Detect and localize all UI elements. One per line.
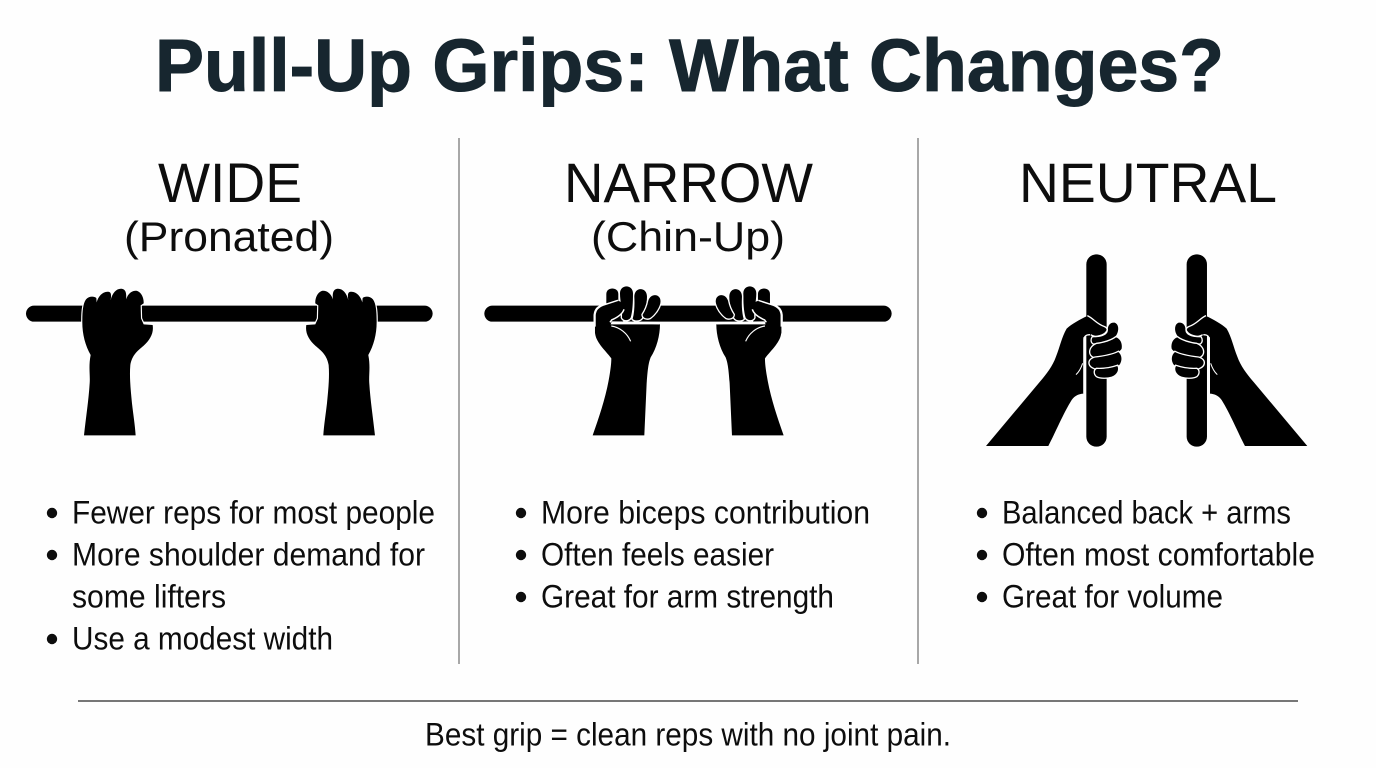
heading: neutral: NEUTRAL	[1019, 152, 1277, 214]
panel: narrow grip	[484, 152, 892, 614]
footer takeaway: Best grip = clean reps with no joint pain.	[425, 716, 951, 752]
panel: wide grip	[26, 152, 435, 656]
heading: wide: (Pronated)	[124, 213, 334, 260]
heading: narrow: NARROW	[564, 152, 814, 214]
list: wide bullets	[47, 494, 435, 656]
list: wide bullets: Use a modest width	[72, 620, 333, 656]
title: Pull-Up Grips: What Changes?	[155, 24, 1224, 107]
heading: wide	[124, 152, 334, 260]
list: narrow bullets	[516, 494, 870, 614]
icon: wide overhand grip on bar	[26, 289, 433, 435]
heading: wide: WIDE	[158, 152, 302, 214]
list: neutral bullets	[977, 494, 1315, 614]
heading: narrow: (Chin-Up)	[591, 213, 785, 260]
list: narrow bullets: Great for arm strength	[541, 578, 834, 614]
list: wide bullets: Fewer reps for most people	[72, 494, 435, 530]
list: narrow bullets: Often feels easier	[541, 536, 774, 572]
list: wide bullets: some lifters	[72, 578, 226, 614]
icon: narrow underhand grip on bar	[484, 286, 892, 435]
icon: neutral grip on vertical handles	[986, 254, 1307, 447]
list: neutral bullets: Balanced back + arms	[1002, 494, 1291, 530]
heading: narrow	[564, 152, 814, 260]
list: neutral bullets: Great for volume	[1002, 578, 1223, 614]
list: neutral bullets: Often most comfortable	[1002, 536, 1315, 572]
list: narrow bullets: More biceps contribution	[541, 494, 870, 530]
list: wide bullets: More shoulder demand for	[72, 536, 425, 572]
panel: neutral grip	[977, 152, 1315, 614]
